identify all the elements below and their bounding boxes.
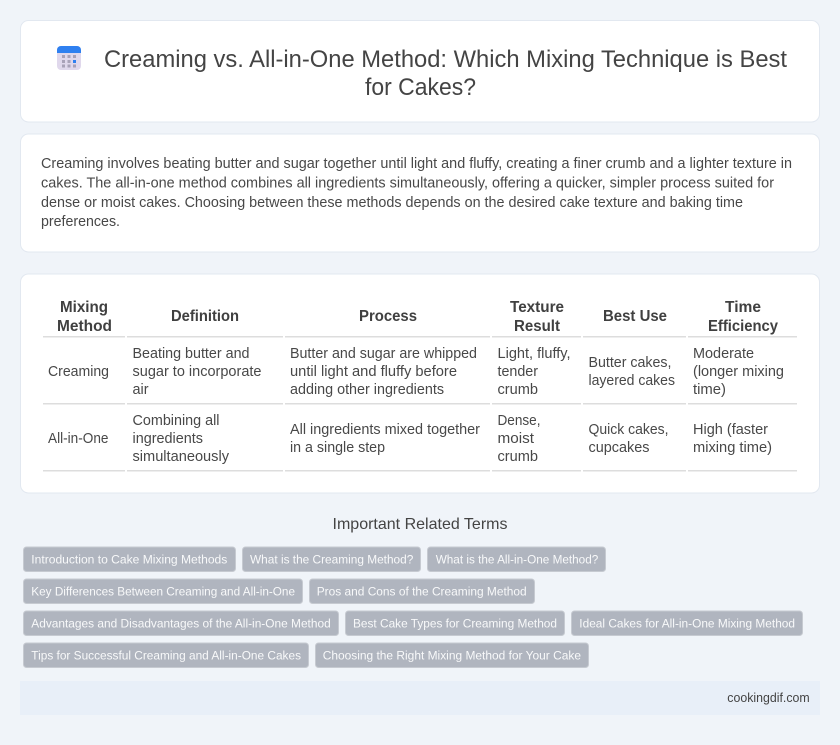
tag: ideal cakes <box>572 611 802 636</box>
table header row: Time <box>725 299 761 316</box>
icon: calendar grid <box>57 46 81 70</box>
table header row: Process <box>359 308 417 325</box>
tag: all-in-one method <box>428 547 606 572</box>
table row: creaming: Butter cakes, <box>588 355 672 371</box>
table row: creaming: until light and fluffy before <box>290 364 457 380</box>
panel: introduction <box>20 134 820 252</box>
panel: related term tags <box>24 547 802 668</box>
table row: all-in-one: Quick cakes, <box>588 422 668 438</box>
table header row: Texture <box>510 299 564 316</box>
panel: comparison table <box>20 274 820 493</box>
tag: introduction <box>24 547 236 572</box>
table row: all-in-one: High (faster <box>693 422 768 438</box>
text block: introduction paragraph: cakes. The all-in-one method combines all ingredients simultaneously, offering a quicker, simpler process suited for <box>41 176 774 192</box>
table row: all-in-one: simultaneously <box>132 449 230 465</box>
table row: all-in-one: Combining all <box>132 413 220 429</box>
tag: pros and cons: Pros and Cons of the Creaming Method <box>317 584 527 598</box>
table row: all-in-one: All ingredients mixed together <box>290 422 480 438</box>
text block: introduction paragraph: Creaming involves beating butter and sugar together until light and fluffy, creating a finer crumb and a lighter texture in <box>41 156 792 172</box>
table header row: Mixing <box>60 299 108 316</box>
tag: best cake types: Best Cake Types for Creaming Method <box>353 616 557 630</box>
table header row: Definition <box>171 308 239 325</box>
table header row <box>43 299 797 338</box>
title: for Cakes? <box>365 74 476 101</box>
table header row: Result <box>514 318 561 335</box>
table row: creaming: Beating butter and <box>132 346 250 362</box>
table row: all-in-one: crumb <box>498 449 538 465</box>
title: Creaming vs. All-in-One Method: Which Mixing Technique is Best <box>104 46 787 73</box>
table header row: Efficiency <box>708 318 778 335</box>
table row: all-in-one: moist <box>498 431 534 447</box>
table row: creaming: time) <box>693 382 726 398</box>
tag: best cake types <box>346 611 564 636</box>
tag: all-in-one method: What is the All-in-One Method? <box>436 552 598 566</box>
table row: all-in-one: in a single step <box>290 440 385 456</box>
tag: creaming method <box>242 547 420 572</box>
tag: ideal cakes: Ideal Cakes for All-in-One Mixing Method <box>579 616 795 630</box>
tag: pros and cons <box>310 579 534 604</box>
tag: tips <box>24 643 308 668</box>
table row: all-in-one: cupcakes <box>588 440 650 456</box>
text block: introduction paragraph: dense or moist cakes. Choosing between these methods depends on the desired cake texture and baking time <box>41 195 743 211</box>
table row: creaming: Moderate <box>693 346 754 362</box>
table row: all-in-one: All-in-One <box>48 431 108 447</box>
table row: creaming: Creaming <box>48 364 109 380</box>
table row: all-in-one: Dense, <box>498 413 540 429</box>
panel: title card <box>20 20 820 122</box>
table row: creaming: Light, fluffy, <box>498 346 570 362</box>
tag: advantages and disadvantages: Advantages and Disadvantages of the All-in-One Method <box>31 616 331 630</box>
table row: all-in-one: mixing time) <box>693 440 772 456</box>
text block: introduction paragraph: preferences. <box>41 214 120 230</box>
table row: creaming: (longer mixing <box>693 364 784 380</box>
tag: introduction: Introduction to Cake Mixing Methods <box>31 552 227 566</box>
footer source text: cookingdif.com <box>727 690 810 705</box>
table row: creaming: sugar to incorporate <box>132 364 262 380</box>
table row: creaming: air <box>132 382 149 398</box>
table row: all-in-one: ingredients <box>132 431 203 447</box>
table row: creaming <box>43 346 797 404</box>
table row: creaming: crumb <box>498 382 538 398</box>
heading: important related terms: Important Related Terms <box>332 516 508 533</box>
tag: key differences <box>24 579 302 604</box>
footer bar <box>20 681 820 715</box>
tag: choosing the right method <box>316 643 588 668</box>
table row: creaming: layered cakes <box>588 373 675 389</box>
table row: all-in-one <box>43 413 797 472</box>
tag: advantages and disadvantages <box>24 611 338 636</box>
tag: creaming method: What is the Creaming Method? <box>250 552 413 566</box>
title <box>104 46 787 101</box>
table row: creaming: Butter and sugar are whipped <box>290 346 477 362</box>
tag: tips: Tips for Successful Creaming and All-in-One Cakes <box>31 648 301 662</box>
table header row: Best Use <box>603 308 667 325</box>
table header row: Method <box>57 318 112 335</box>
tag: choosing the right method: Choosing the Right Mixing Method for Your Cake <box>323 648 581 662</box>
table row: creaming: adding other ingredients <box>290 382 444 398</box>
text block: introduction paragraph <box>41 156 792 230</box>
tag: key differences: Key Differences Between Creaming and All-in-One <box>31 584 295 598</box>
table row: creaming: tender <box>498 364 538 380</box>
